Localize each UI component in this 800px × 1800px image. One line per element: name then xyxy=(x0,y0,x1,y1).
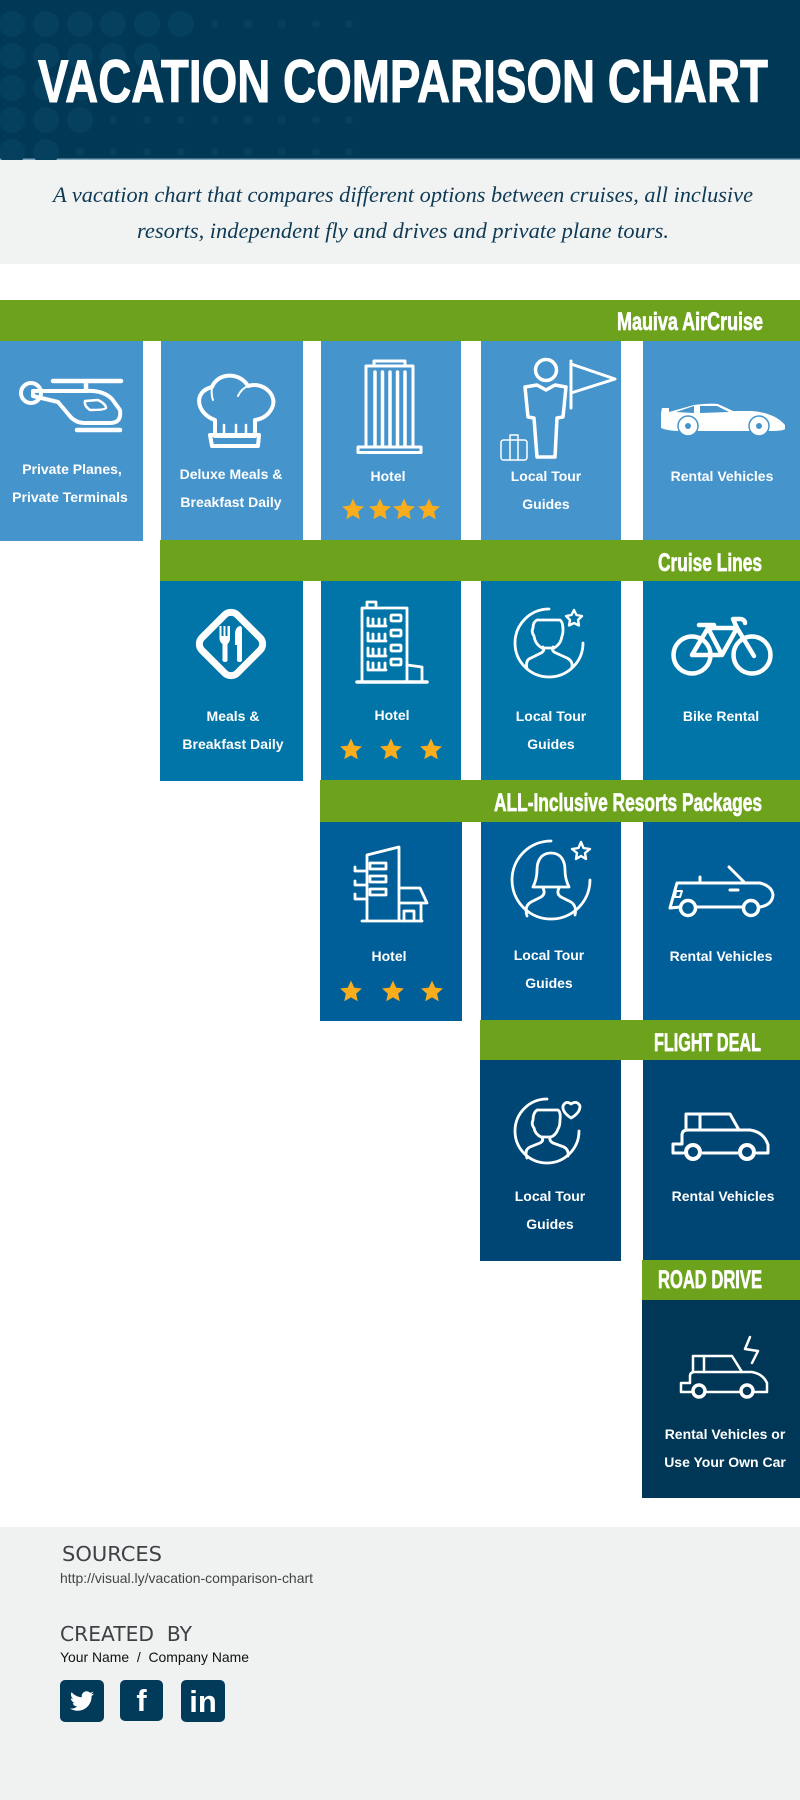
icon: resort hotel xyxy=(355,847,427,921)
section: Road Drive xyxy=(642,1260,800,1498)
card: hotel 3 stars xyxy=(321,581,461,781)
icon: bicycle xyxy=(674,619,770,674)
section: All-Inclusive Resorts Packages xyxy=(320,780,800,1021)
icon: facebook: f xyxy=(136,1683,147,1718)
card: tour guides xyxy=(481,581,621,781)
label: Hotel xyxy=(370,468,406,484)
card: tour guides xyxy=(481,341,621,540)
label: Guides xyxy=(526,1216,574,1232)
icon: linkedin xyxy=(181,1680,225,1722)
footer panel xyxy=(0,1527,800,1800)
intro text line 1: A vacation chart that compares different options between cruises, all inclusive xyxy=(51,182,753,207)
label: Private Terminals xyxy=(12,489,128,505)
icon: chef hat xyxy=(199,376,273,446)
card: rental or own car xyxy=(642,1300,800,1498)
icon: guide with heart xyxy=(515,1099,580,1163)
icon: twitter xyxy=(60,1680,104,1722)
icon: sports car xyxy=(661,404,785,436)
card: tour guides xyxy=(481,822,621,1020)
section: Mauiva AirCruise xyxy=(0,300,800,541)
label: Hotel xyxy=(372,948,406,964)
intro text line 2: resorts, independent fly and drives and private plane tours. xyxy=(137,218,669,243)
label: Meals & xyxy=(207,708,259,724)
icon: car with lightning xyxy=(681,1337,767,1397)
card: bike rental xyxy=(643,581,800,781)
label xyxy=(182,708,284,752)
label xyxy=(511,468,582,512)
icon: car xyxy=(673,1114,768,1159)
card: hotel 4 stars xyxy=(321,341,461,540)
label xyxy=(514,947,585,991)
icon: facebook xyxy=(120,1680,163,1721)
icon: apartment hotel xyxy=(357,602,427,682)
section: Flight Deal xyxy=(480,1020,800,1261)
label: Private Planes, xyxy=(22,461,122,477)
label xyxy=(664,1426,786,1470)
label: Breakfast Daily xyxy=(182,736,284,752)
section: Cruise Lines xyxy=(160,540,800,781)
created by heading: CREATED BY xyxy=(60,1622,192,1646)
label: Rental Vehicles xyxy=(672,1188,775,1204)
card: rental vehicles xyxy=(643,1060,800,1260)
rating stars xyxy=(342,498,440,519)
header banner xyxy=(0,0,800,165)
icon: fork and knife diamond xyxy=(196,609,266,679)
label xyxy=(515,1188,586,1232)
icon: linkedin: in xyxy=(189,1684,217,1719)
label xyxy=(12,461,128,505)
label: Rental Vehicles xyxy=(670,948,773,964)
label: Local Tour xyxy=(511,468,582,484)
label: Rental Vehicles xyxy=(671,468,774,484)
label: Use Your Own Car xyxy=(664,1454,786,1470)
label: Rental Vehicles or xyxy=(665,1426,786,1442)
author line: Your Name / Company Name xyxy=(60,1649,249,1665)
card: private planes xyxy=(0,341,143,541)
card: rental vehicles xyxy=(643,341,800,540)
label xyxy=(516,708,587,752)
label: Local Tour xyxy=(514,947,585,963)
label: Bike Rental xyxy=(683,708,759,724)
intro panel xyxy=(0,160,800,264)
icon: tower hotel xyxy=(358,361,421,452)
label: Local Tour xyxy=(516,708,587,724)
icon: convertible xyxy=(670,867,773,916)
card: tour guides xyxy=(480,1060,621,1261)
rating stars xyxy=(340,738,442,759)
sources link: http://visual.ly/vacation-comparison-chart xyxy=(60,1570,313,1586)
card: deluxe meals xyxy=(161,341,303,540)
label: Guides xyxy=(522,496,570,512)
label: Deluxe Meals & xyxy=(180,466,282,482)
card: hotel 3 stars xyxy=(320,822,462,1021)
icon: female guide with star xyxy=(512,841,590,919)
label: Hotel xyxy=(374,707,410,723)
sources heading: SOURCES xyxy=(62,1542,162,1566)
icon: guide with flag xyxy=(501,360,615,460)
card: rental vehicles xyxy=(643,822,800,1020)
label: Breakfast Daily xyxy=(180,494,282,510)
icon: helicopter xyxy=(21,381,121,430)
card: meals xyxy=(160,581,303,781)
label: Guides xyxy=(525,975,573,991)
label: Guides xyxy=(527,736,575,752)
label xyxy=(180,466,282,510)
label: Local Tour xyxy=(515,1188,586,1204)
icon: guide with star xyxy=(515,609,583,677)
rating stars xyxy=(340,980,443,1001)
